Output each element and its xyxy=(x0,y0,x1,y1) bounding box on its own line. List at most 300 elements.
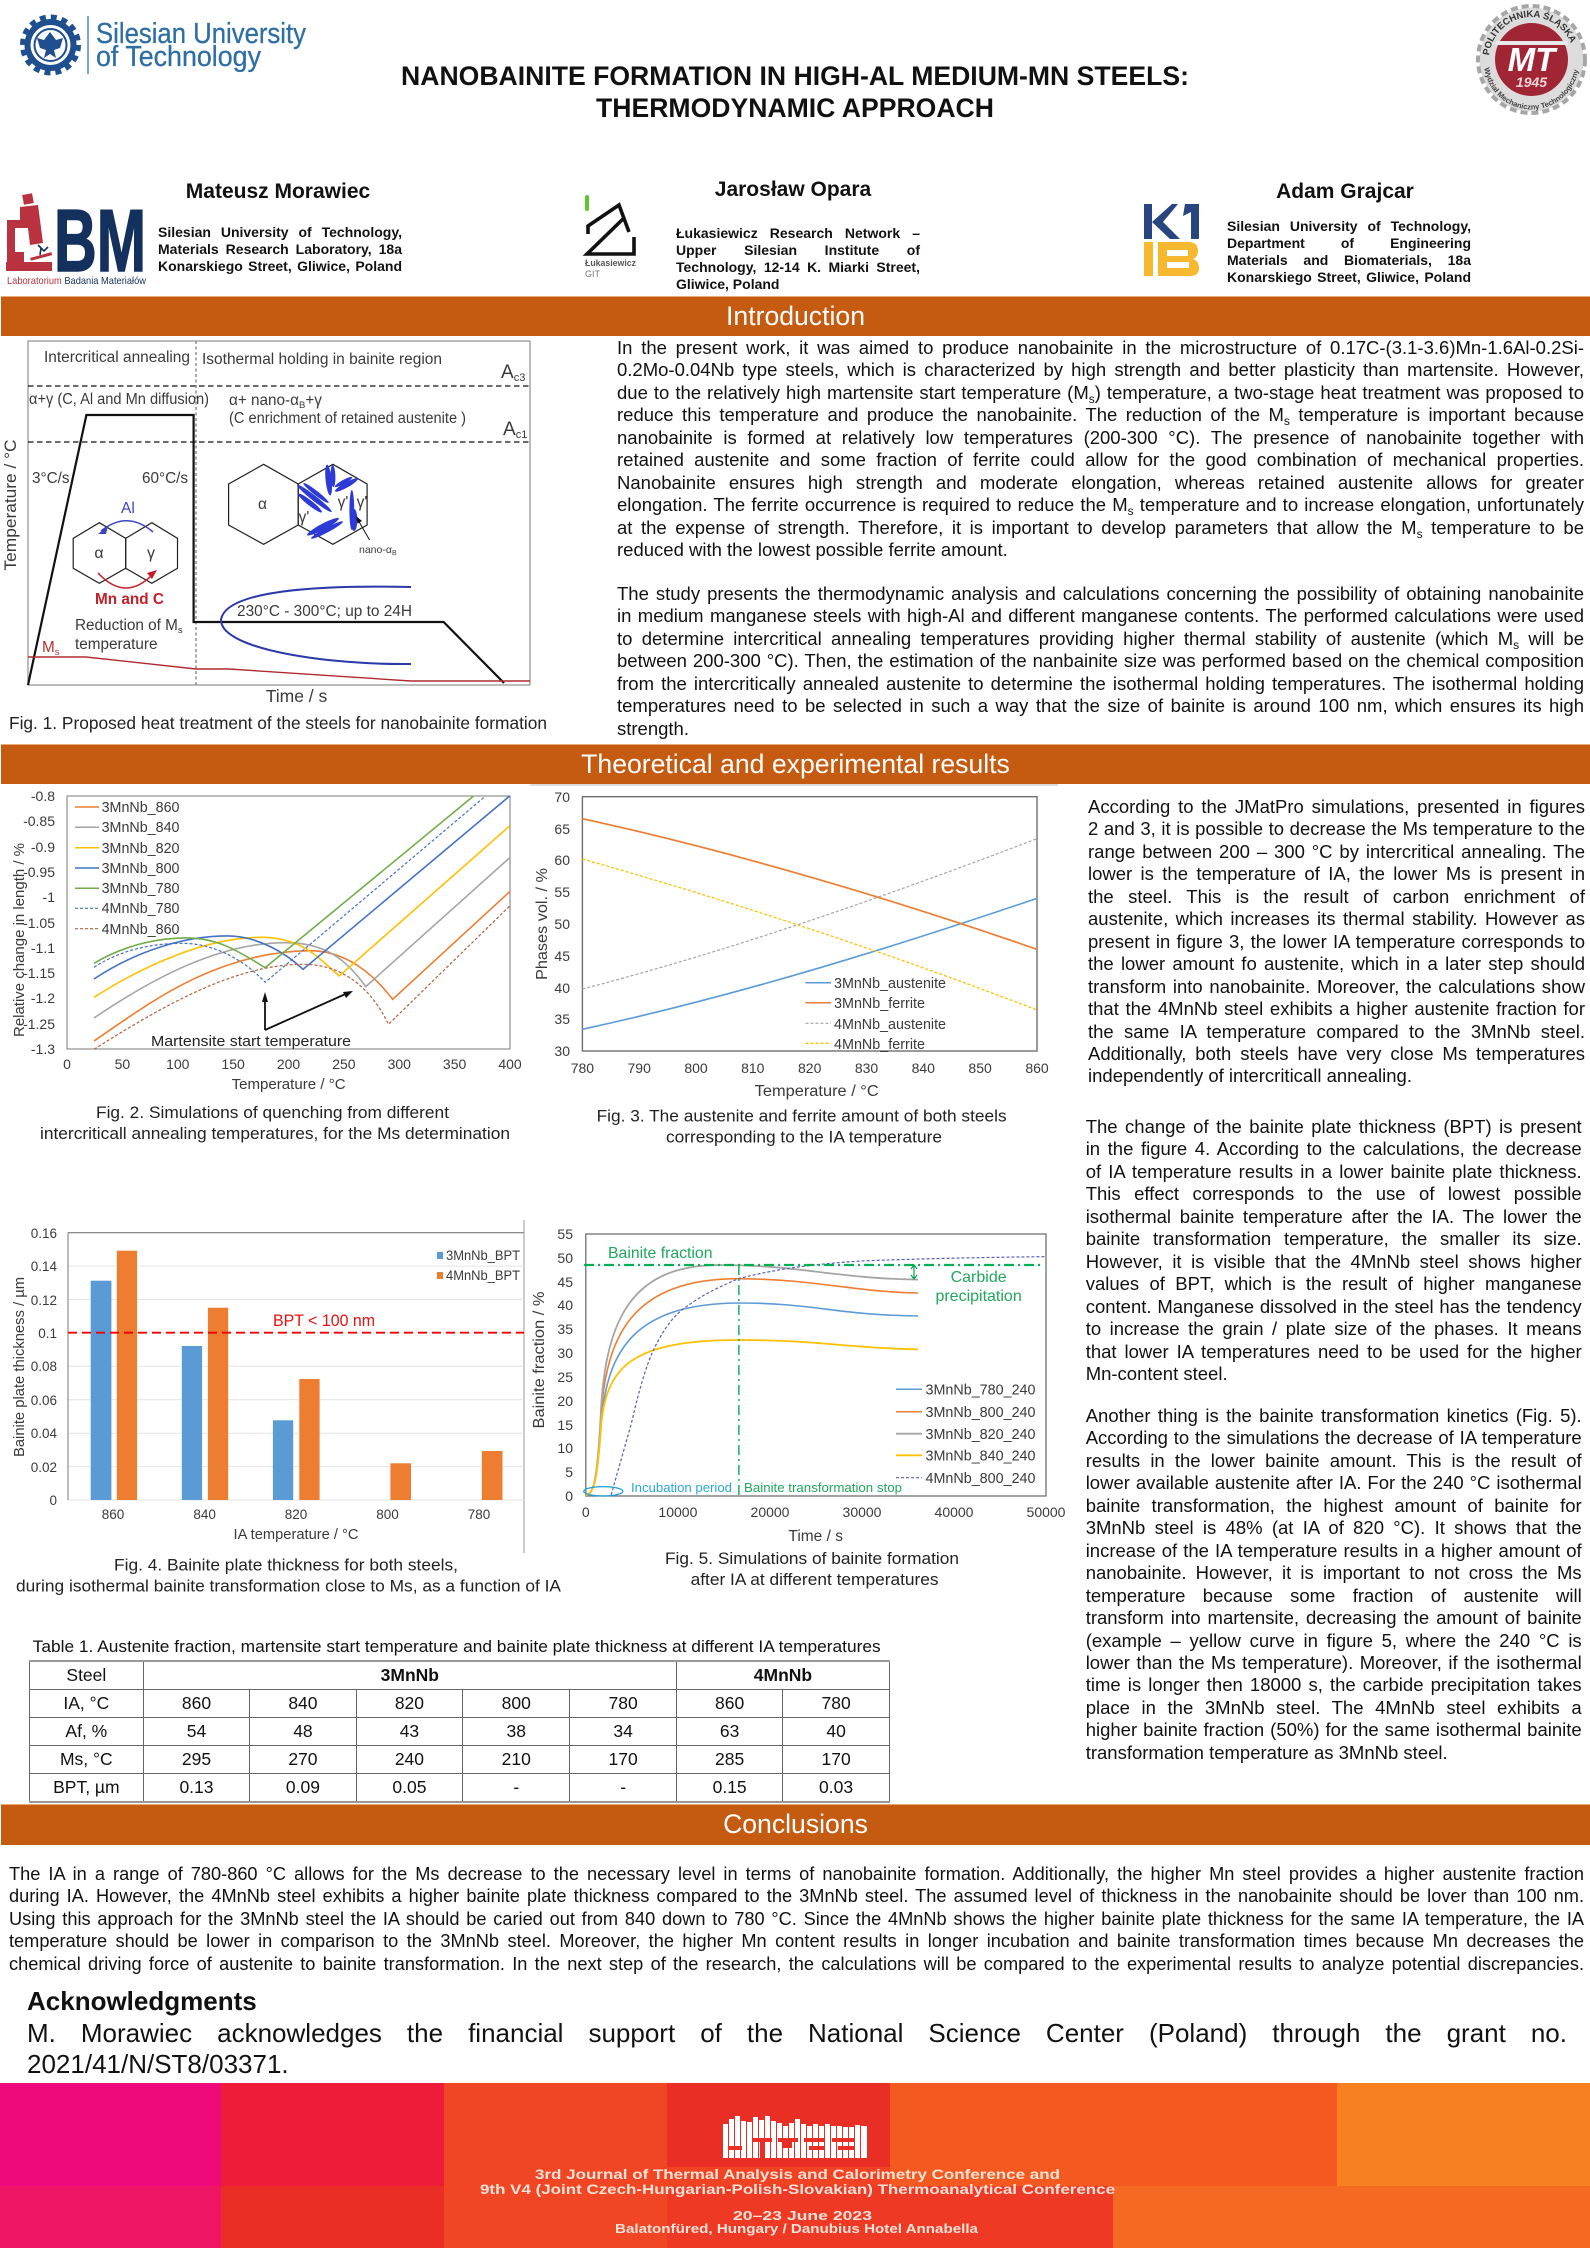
introduction text, second paragraph: The study presents the thermodynamic analysis and calculations concerning the possibility of obtaining nanobainite xyxy=(617,583,1584,604)
author name: Adam Grajcar xyxy=(1276,180,1414,203)
results text: JMatPro simulations: that the 4MnNb steel exhibits a higher austenite fraction for xyxy=(1088,998,1585,1019)
right hexagons with nano bainite plates: α xyxy=(258,496,267,513)
x axis labels: 840 xyxy=(193,1507,216,1522)
x axis labels: 30000 xyxy=(843,1504,882,1520)
table 1: 800 xyxy=(502,1693,531,1713)
x axis labels: 820 xyxy=(798,1060,822,1076)
y axis labels xyxy=(23,788,55,1057)
table 1: Steel xyxy=(66,1665,106,1685)
affiliation: Materials Research Laboratory, 18a xyxy=(158,241,402,257)
acknowledgments text: 2021/41/N/ST8/03371. xyxy=(27,2049,289,2079)
results text: bainite kinetics: transform into martensite, decreasing the amount of bainite xyxy=(1086,1607,1582,1628)
title xyxy=(401,61,1189,122)
region labels: 3°C/s xyxy=(32,470,70,487)
figure 3: phases chart xyxy=(530,784,1058,1100)
logo: Faculty of Mechanical Engineering 1945: Wydział Mechaniczny Technologiczny xyxy=(1484,67,1580,111)
introduction text, second paragraph: temperatures need to be selected in such a way that the size of bainite is around 100 nm, which ensures its high xyxy=(617,695,1584,716)
table 1: 4MnNb xyxy=(754,1665,812,1685)
introduction text: at the expense of strength. Therefore, it is important to develop parameters that allow the Ms temperature to be xyxy=(617,517,1584,541)
introduction text: In the present work, it was aimed to produce nanobainite in the microstructure of 0.17C-(3.1-3.6)Mn-1.6Al-0.2Si- xyxy=(617,337,1584,358)
y axis labels xyxy=(31,1226,57,1508)
Ms reduction note: Reduction of M xyxy=(75,617,178,634)
x axis labels: 250 xyxy=(332,1056,356,1072)
table 1 xyxy=(29,1660,890,1803)
introduction text: elongation. The ferrite occurrence is required to reduce the Ms temperature and to increase elongation, unfortunately xyxy=(617,494,1584,518)
legend: 3MnNb_820_240 xyxy=(926,1427,1036,1443)
affiliation: Technology, 12-14 K. Miarki Street, xyxy=(676,259,920,275)
left hexagons with diffusion arrows: Mn and C xyxy=(95,591,164,608)
legend: 3MnNb_ferrite xyxy=(834,996,925,1012)
results text: bainite plate thickness: of IA temperature results in a lower bainite plate thickness. xyxy=(1086,1161,1582,1182)
y axis labels: 0.08 xyxy=(31,1359,57,1374)
region labels: 60°C/s xyxy=(142,470,188,487)
figure 2 caption: intercriticall annealing temperatures, for the Ms determination xyxy=(40,1124,510,1143)
title: NANOBAINITE FORMATION IN HIGH-AL MEDIUM-MN STEELS: xyxy=(401,61,1189,91)
results text: bainite kinetics: place in the 3MnNb steel. The 4MnNb steel exhibits a xyxy=(1086,1697,1582,1718)
x axis labels: 0 xyxy=(63,1056,71,1072)
y axis labels: -0.85 xyxy=(23,813,55,829)
table 1: Ms, °C xyxy=(60,1749,113,1769)
legend xyxy=(75,800,180,938)
y axis labels: -0.9 xyxy=(31,839,55,855)
figure 2 caption xyxy=(40,1103,510,1143)
logo: KMIB xyxy=(1144,204,1199,276)
y axis labels: 0.1 xyxy=(38,1326,57,1341)
table 1: - xyxy=(620,1777,626,1797)
x axis labels: 780 xyxy=(468,1507,490,1522)
green annotations: precipitation xyxy=(935,1288,1022,1305)
results text: bainite kinetics: transformation temperature as 3MnNb steel. xyxy=(1086,1742,1448,1763)
results text: JMatPro simulations: the steel. This is the result of carbon enrichment of xyxy=(1088,886,1585,907)
results text: bainite kinetics: lower available austenite after IA. For the 240 °C isothermal xyxy=(1086,1472,1582,1493)
table 1: 34 xyxy=(613,1721,633,1741)
affiliation xyxy=(1227,218,1472,285)
results text: bainite kinetics xyxy=(1086,1405,1582,1763)
region labels: α+ nano-α xyxy=(229,392,299,409)
affiliation: Silesian University of Technology, xyxy=(158,224,402,240)
y axis labels: -0.8 xyxy=(31,788,55,804)
logo: Faculty of Mechanical Engineering 1945: 1945 xyxy=(1516,74,1547,90)
region labels: α+γ (C, Al and Mn diffusion) xyxy=(29,391,209,408)
green annotations: Bainite fraction xyxy=(608,1245,712,1262)
legend: 4MnNb_860 xyxy=(102,922,180,938)
incubation period marker: Incubation period xyxy=(631,1480,732,1495)
y axis labels xyxy=(557,1226,573,1504)
y axis labels: 20 xyxy=(557,1393,573,1409)
y axis labels: 0.04 xyxy=(31,1426,57,1441)
author name: Jarosław Opara xyxy=(715,178,871,201)
region labels: A xyxy=(503,419,516,440)
y axis labels: 50 xyxy=(557,1250,573,1266)
introduction text: reduce this temperature and produce the nanobainite. The reduction of the Ms temperature is important because xyxy=(617,404,1584,428)
figure 5: bainite formation kinetics chart: Bainite fraction / % xyxy=(531,1291,548,1428)
right hexagons with nano bainite plates: γ' xyxy=(299,509,309,526)
conference text: Balatonfüred, Hungary / Danubius Hotel Annabella xyxy=(615,2222,979,2236)
figure 3 caption: Fig. 3. The austenite and ferrite amount of both steels xyxy=(597,1107,1007,1126)
legend xyxy=(806,976,946,1053)
green annotations: Carbide xyxy=(951,1269,1007,1286)
results text: bainite kinetics: higher bainite fraction (50%) for the same isothermal bainite xyxy=(1086,1719,1582,1740)
introduction text: due to the relatively high martensite start temperature (Ms) temperature, a two-stage heat treatment was proposed to xyxy=(617,382,1584,406)
results text: bainite plate thickness: in the figure 4. According to the calculations, the decrease xyxy=(1086,1138,1582,1159)
table 1: 860 xyxy=(182,1693,211,1713)
bars: 4MnNb xyxy=(117,1251,503,1500)
figure 4: bainite plate thickness bar chart: IA temperature / °C xyxy=(234,1527,358,1543)
legend: 3MnNb_austenite xyxy=(834,976,946,992)
table 1: 0.05 xyxy=(392,1777,426,1797)
y axis labels: 50 xyxy=(554,916,570,932)
figure 5: bainite formation kinetics chart: Time / s xyxy=(788,1528,843,1545)
conference text: 20–23 June 2023 xyxy=(733,2209,872,2223)
figure 5 caption: after IA at different temperatures xyxy=(691,1570,939,1589)
logo: Łukasiewicz GIT: GIT xyxy=(585,269,601,279)
results text: JMatPro simulations: Additionally, both steels have very close Ms temperatures xyxy=(1088,1043,1585,1064)
table 1: - xyxy=(513,1777,519,1797)
section banner: Theoretical and experimental results xyxy=(1,744,1590,784)
figure 2: quenching simulations chart xyxy=(11,788,522,1093)
legend: 4MnNb_780 xyxy=(102,901,180,917)
x axis labels: 100 xyxy=(166,1056,190,1072)
region labels: Intercritical annealing xyxy=(44,349,190,366)
results text: JMatPro simulations: austenite, which increases its thermal stability. However as xyxy=(1088,908,1585,929)
y axis labels: 0.12 xyxy=(31,1293,57,1308)
figure 1: heat treatment diagram: 230°C - 300°C; up to 24H xyxy=(237,603,412,620)
y axis labels: 25 xyxy=(557,1369,573,1385)
affiliation: Konarskiego Street, Gliwice, Poland xyxy=(1227,269,1471,285)
figure 3 caption: corresponding to the IA temperature xyxy=(666,1128,942,1147)
x axis labels: 860 xyxy=(102,1507,124,1522)
table 1: 780 xyxy=(609,1693,638,1713)
x axis labels: 10000 xyxy=(658,1504,698,1520)
y axis labels: -1.25 xyxy=(23,1016,55,1032)
conclusions text: during IA. However, the 4MnNb steel exhibits a higher bainite plate thickness compared to the 3MnNb steel. The assumed level of thickness in the nanobainite should be lover than 100 nm. xyxy=(9,1886,1584,1906)
affiliation: Silesian University of Technology, xyxy=(1227,218,1471,234)
table 1: 780 xyxy=(821,1693,851,1713)
table 1: 0.15 xyxy=(713,1777,747,1797)
legend: 4MnNb_ferrite xyxy=(834,1037,925,1053)
figure 5 caption: Fig. 5. Simulations of bainite formation xyxy=(665,1549,959,1568)
legend: 3MnNb_780 xyxy=(102,881,180,897)
acknowledgments text: M. Morawiec acknowledges the financial support of the National Science Center (Poland) through the grant no. xyxy=(27,2018,1567,2048)
results text: bainite kinetics: bainite transformation, the highest amount of bainite for xyxy=(1086,1495,1582,1516)
results text: bainite plate thickness: This effect corresponds to the use of lowest possible xyxy=(1086,1183,1582,1204)
y axis labels: -0.95 xyxy=(23,864,55,880)
figure 3 caption xyxy=(597,1107,1007,1147)
y axis labels: 55 xyxy=(554,884,570,900)
bainite C-curve xyxy=(221,587,411,664)
figure 5 caption xyxy=(665,1549,959,1589)
x axis labels xyxy=(582,1504,1066,1520)
results text: bainite plate thickness: values of BPT, which is the result of higher manganese xyxy=(1086,1273,1582,1294)
affiliation: Upper Silesian Institute of xyxy=(676,242,920,258)
x axis labels: 300 xyxy=(388,1056,411,1072)
legend: 3MnNb_BPT xyxy=(446,1248,520,1263)
curves xyxy=(94,796,510,1049)
conference text: 3rd Journal of Thermal Analysis and Calorimetry Conference and xyxy=(535,2167,1060,2182)
left hexagons with diffusion arrows: Al xyxy=(121,500,135,517)
results text: JMatPro simulations: independently of intercriticall annealing. xyxy=(1088,1065,1412,1086)
y axis labels: 55 xyxy=(557,1226,573,1242)
author block: Mateusz Morawiec xyxy=(6,180,402,290)
introduction text, second paragraph: in medium manganese steels with high-Al and different manganese contents. The performed calculations were used xyxy=(617,605,1584,626)
results text: bainite plate thickness: content. Manganese dissolved in the steel has the tendency xyxy=(1086,1296,1582,1317)
y axis labels: 15 xyxy=(557,1417,573,1433)
Ms reduction note xyxy=(42,617,183,658)
y axis labels: 0 xyxy=(49,1493,57,1508)
y axis labels: -1.1 xyxy=(31,940,55,956)
logo: Silesian University of Technology: Silesian University xyxy=(96,18,306,50)
x axis labels: 20000 xyxy=(751,1504,790,1520)
table 1: 295 xyxy=(182,1749,211,1769)
introduction text, second paragraph: from the intercritically annealed austenite to determine the isothermal holding temperatures. The isothermal holding xyxy=(617,673,1584,694)
introduction text: 0.2Mo-0.04Nb type steels, which is characterized by high strength and better plasticity than martensite. However, xyxy=(617,359,1584,380)
y axis labels: -1.3 xyxy=(31,1041,55,1057)
logo: Łukasiewicz GIT: Łukasiewicz xyxy=(585,258,636,269)
legend: 4MnNb_800_240 xyxy=(926,1471,1036,1487)
x axis labels xyxy=(102,1507,490,1522)
logo: Laboratorium Badania Materiałów: Laboratorium Badania Materiałów xyxy=(7,275,146,287)
section banner: Introduction xyxy=(1,296,1590,336)
results text: JMatPro simulations: 2 and 3, it is possible to decrease the Ms temperature to the xyxy=(1088,818,1585,839)
logo: Faculty of Mechanical Engineering 1945: MT xyxy=(1508,41,1558,78)
results text: bainite kinetics: nanobainite. However, it is important to not cross the Ms xyxy=(1086,1562,1582,1583)
introduction text xyxy=(617,337,1584,560)
x axis labels: 860 xyxy=(1025,1060,1049,1076)
region labels: (C enrichment of retained austenite ) xyxy=(229,410,466,427)
region labels: B xyxy=(299,400,305,411)
y axis labels: 0.02 xyxy=(31,1460,57,1475)
legend xyxy=(437,1248,520,1283)
section banner: Introduction: Introduction xyxy=(726,301,865,331)
table 1: 0.09 xyxy=(286,1777,320,1797)
introduction text, second paragraph: between 200-300 °C). Then, the estimation of the nanbainite size was performed based on the chemical composition xyxy=(617,650,1584,671)
x axis labels: 800 xyxy=(376,1507,399,1522)
affiliation xyxy=(676,225,920,292)
author block: Jarosław Opara xyxy=(582,178,920,292)
figure 4 caption: Fig. 4. Bainite plate thickness for both steels, xyxy=(114,1556,458,1575)
figure 1: heat treatment diagram xyxy=(2,340,547,733)
y axis labels: 40 xyxy=(557,1297,573,1313)
y axis labels: 0.14 xyxy=(31,1259,57,1274)
y axis labels: -1.15 xyxy=(23,965,55,981)
colour blocks xyxy=(0,2083,1590,2248)
results text: bainite plate thickness: Mn-content steel. xyxy=(1086,1363,1228,1384)
affiliation: Materials and Biomaterials, 18a xyxy=(1227,252,1471,268)
results text: bainite plate thickness: bainite transformation temperature, the smaller its size. xyxy=(1086,1228,1582,1249)
right hexagons with nano bainite plates xyxy=(229,464,397,557)
y axis labels: 35 xyxy=(554,1011,570,1027)
conclusions text: temperature should be lower in comparison to the 3MnNb steel. Moreover, the higher Mn content results in longer incubation and bainite transformation times because Mn decreases the xyxy=(9,1931,1584,1951)
affiliation: Department of Engineering xyxy=(1227,235,1471,251)
introduction text: nanobainite is formed at relatively low temperatures (200-300 °C). The presence of nanobainite together with xyxy=(617,427,1584,448)
table 1: 170 xyxy=(609,1749,638,1769)
title: THERMODYNAMIC APPROACH xyxy=(596,92,994,122)
figure 3: phases chart: Phases vol. / % xyxy=(534,868,551,980)
introduction text, second paragraph xyxy=(617,583,1584,739)
conclusions text: The IA in a range of 780-860 °C allows for the Ms decrease to the necessary level in terms of nanobainite formation. Additionally, the higher Mn steel provides a higher austenite fraction xyxy=(9,1864,1584,1884)
table 1: Af, % xyxy=(65,1721,107,1741)
y axis labels: -1.05 xyxy=(23,915,55,931)
table 1: IA, °C xyxy=(63,1693,109,1713)
results text: bainite plate thickness: to increase the grain / plate size of the phases. It means xyxy=(1086,1318,1582,1339)
x axis labels: 790 xyxy=(628,1060,651,1076)
y axis labels: 60 xyxy=(554,852,570,868)
results text: bainite plate thickness: that lower IA temperatures need to be used for the higher xyxy=(1086,1341,1582,1362)
table 1: 63 xyxy=(720,1721,739,1741)
right hexagons with nano bainite plates: γ' xyxy=(338,494,348,511)
results text: JMatPro simulations: the same IA temperature compared to the 3MnNb steel. xyxy=(1088,1021,1585,1042)
left hexagons with diffusion arrows xyxy=(73,500,178,608)
table 1: 240 xyxy=(395,1749,424,1769)
bars: 3MnNb xyxy=(91,1281,293,1500)
table 1: BPT, µm xyxy=(53,1777,120,1797)
figure 5: bainite formation kinetics chart xyxy=(531,1226,1066,1545)
y axis labels: 40 xyxy=(554,980,570,996)
author block: Adam Grajcar xyxy=(1144,180,1472,285)
results text: bainite kinetics: results in the lower bainite amount. This is the result of xyxy=(1086,1450,1582,1471)
figure 4: bainite plate thickness bar chart xyxy=(12,1220,524,1553)
section banner: Conclusions xyxy=(1,1804,1590,1845)
results text: JMatPro simulations: lower is the temperature of IA, the lower Ms is present in xyxy=(1088,863,1585,884)
figure 3: phases chart: Temperature / °C xyxy=(755,1083,879,1100)
y axis labels: -1.2 xyxy=(31,990,55,1006)
region labels: A xyxy=(501,362,514,383)
logo: Silesian University of Technology xyxy=(20,14,306,76)
introduction text: retained austenite and some fraction of ferrite could allow for the good combination of mechanical properties. xyxy=(617,449,1584,470)
y axis labels: 65 xyxy=(554,821,570,837)
x axis labels xyxy=(571,1060,1049,1076)
x axis labels: 350 xyxy=(443,1056,466,1072)
y axis labels: 35 xyxy=(557,1321,573,1337)
y axis labels: 30 xyxy=(557,1345,573,1361)
legend: 4MnNb_BPT xyxy=(446,1268,520,1283)
legend: 3MnNb_780_240 xyxy=(926,1382,1036,1398)
region labels: Isothermal holding in bainite region xyxy=(202,351,442,368)
region labels: +γ xyxy=(305,392,322,409)
y axis labels: 45 xyxy=(554,948,570,964)
logo: Faculty of Mechanical Engineering 1945: POLITECHNIKA ŚLĄSKA xyxy=(1482,10,1576,55)
Ms reduction note: temperature xyxy=(75,636,157,653)
table 1: 0.03 xyxy=(819,1777,853,1797)
results text: bainite kinetics: Another thing is the bainite transformation kinetics (Fig. 5). xyxy=(1086,1405,1582,1426)
affiliation: Gliwice, Poland xyxy=(676,276,779,292)
logo: Łukasiewicz GIT xyxy=(582,195,636,279)
introduction text: Nanobainite ensures high strength and moderate elongation, whereas retained austenite allows for greater xyxy=(617,472,1584,493)
y axis labels: 0.06 xyxy=(31,1393,57,1408)
logo: Laboratorium Badania Materiałów xyxy=(6,191,146,290)
green annotations: Bainite transformation stop xyxy=(744,1480,902,1495)
legend: 4MnNb_austenite xyxy=(834,1017,946,1033)
y axis labels: 5 xyxy=(565,1464,573,1480)
table 1: 270 xyxy=(288,1749,318,1769)
results text: bainite plate thickness xyxy=(1086,1116,1582,1384)
Ms line xyxy=(28,657,530,681)
x axis labels: 40000 xyxy=(935,1504,974,1520)
logo: Faculty of Mechanical Engineering 1945 xyxy=(1476,4,1587,115)
right hexagons with nano bainite plates: B xyxy=(392,550,397,557)
y axis labels: -1 xyxy=(43,889,55,905)
x axis labels: 810 xyxy=(741,1060,765,1076)
results text: bainite plate thickness: isothermal bainite temperature after the IA. The lower the xyxy=(1086,1206,1582,1227)
conclusions text: Using this approach for the 3MnNb steel the IA should be caried out from 840 down to 780 °C. Since the 4MnNb shows the higher bainite plate thickness for the same IA temperature, the IA xyxy=(9,1909,1584,1929)
region labels xyxy=(29,349,527,487)
x axis labels: 50000 xyxy=(1027,1504,1066,1520)
acknowledgments heading: Acknowledgments xyxy=(27,1986,257,2016)
x axis labels: 830 xyxy=(855,1060,878,1076)
x axis labels: 820 xyxy=(285,1507,307,1522)
x axis labels: 800 xyxy=(684,1060,708,1076)
incubation period marker xyxy=(584,1480,732,1496)
results text: JMatPro simulations xyxy=(1088,796,1586,1086)
table 1: 48 xyxy=(293,1721,313,1741)
introduction text, second paragraph: to determine intercritical annealing temperatures providing higher thermal stability of austenite (which Ms will be xyxy=(617,628,1584,652)
logo: Silesian University of Technology: of Technology xyxy=(96,41,261,73)
threshold line: BPT 100 nm: BPT < 100 nm xyxy=(273,1311,375,1330)
Ms reduction note: s xyxy=(178,625,183,636)
acknowledgments text xyxy=(27,2018,1567,2079)
footer: conference banner xyxy=(0,2083,1590,2248)
y axis labels: 10 xyxy=(557,1440,573,1456)
x axis labels: 400 xyxy=(498,1056,522,1072)
conference text: 9th V4 (Joint Czech-Hungarian-Polish-Slovakian) Thermoanalytical Conference xyxy=(480,2182,1116,2197)
table 1: 840 xyxy=(288,1693,318,1713)
conclusions text: chemical driving force of austenite to bainite transformation. In the next step of the research, the calculations will be compared to the experimental results to analyze potential discrepancies. xyxy=(9,1954,1584,1974)
results text: JMatPro simulations: the lower amount fo austenite, which in a later step should xyxy=(1088,953,1585,974)
y axis labels: 0.16 xyxy=(31,1226,57,1241)
results text: bainite kinetics: time is longer then 18000 s, the carbide precipitation takes xyxy=(1086,1674,1582,1695)
right hexagons with nano bainite plates: nano-α xyxy=(359,544,392,556)
table 1: 0.13 xyxy=(179,1777,214,1797)
figure 4 caption: during isothermal bainite transformation close to Ms, as a function of IA xyxy=(16,1577,562,1596)
affiliation: Konarskiego Street, Gliwice, Poland xyxy=(158,258,402,274)
introduction text: reduced with the lowest possible ferrite amount. xyxy=(617,539,1008,560)
x axis labels: 200 xyxy=(277,1056,300,1072)
x axis labels: 50 xyxy=(115,1056,130,1072)
results text: JMatPro simulations: transform into nanobainite. Moreover, the calculations show xyxy=(1088,976,1585,997)
right hexagons with nano bainite plates: γ' xyxy=(357,494,367,511)
results text: bainite kinetics: 3MnNb steel is 48% (at IA of 820 °C). It shows that the xyxy=(1086,1517,1582,1538)
legend: 3MnNb_840 xyxy=(102,820,180,836)
region labels: c3 xyxy=(514,372,525,384)
table 1: 820 xyxy=(395,1693,424,1713)
figure 2 caption: Fig. 2. Simulations of quenching from different xyxy=(96,1103,449,1122)
logo: Laboratorium Badania Materiałów: BM xyxy=(54,191,146,290)
annotation arrows: martensite start temperature xyxy=(151,991,353,1050)
Ms reduction note: M xyxy=(42,639,55,656)
table 1: 860 xyxy=(715,1693,744,1713)
table 1: 3MnNb xyxy=(381,1665,439,1685)
results text: JMatPro simulations: range between 200 – 300 °C by intercritical annealing. The xyxy=(1088,841,1585,862)
figure 4: bainite plate thickness bar chart: Bainite plate thickness / µm xyxy=(12,1277,28,1457)
curves xyxy=(584,1257,1046,1496)
icon: JTACC bar logo xyxy=(723,2116,867,2158)
legend: 3MnNb_800_240 xyxy=(926,1405,1036,1421)
results text: JMatPro simulations: According to the JMatPro simulations, presented in figures xyxy=(1088,796,1585,817)
legend: 3MnNb_800 xyxy=(102,861,180,877)
conference text xyxy=(480,2167,1116,2236)
axis titles: Temperature / °C xyxy=(2,439,20,570)
y axis labels: 70 xyxy=(554,789,570,805)
legend: 3MnNb_820 xyxy=(102,841,180,857)
section banner: Conclusions: Conclusions xyxy=(723,1809,868,1839)
legend: 3MnNb_840_240 xyxy=(926,1448,1036,1464)
table 1: 210 xyxy=(502,1749,531,1769)
annotation arrows: martensite start temperature: Martensite start temperature xyxy=(151,1033,351,1050)
green guide lines xyxy=(584,1264,1040,1266)
affiliation xyxy=(158,224,402,274)
legend xyxy=(896,1382,1036,1487)
author name: Mateusz Morawiec xyxy=(186,180,370,203)
